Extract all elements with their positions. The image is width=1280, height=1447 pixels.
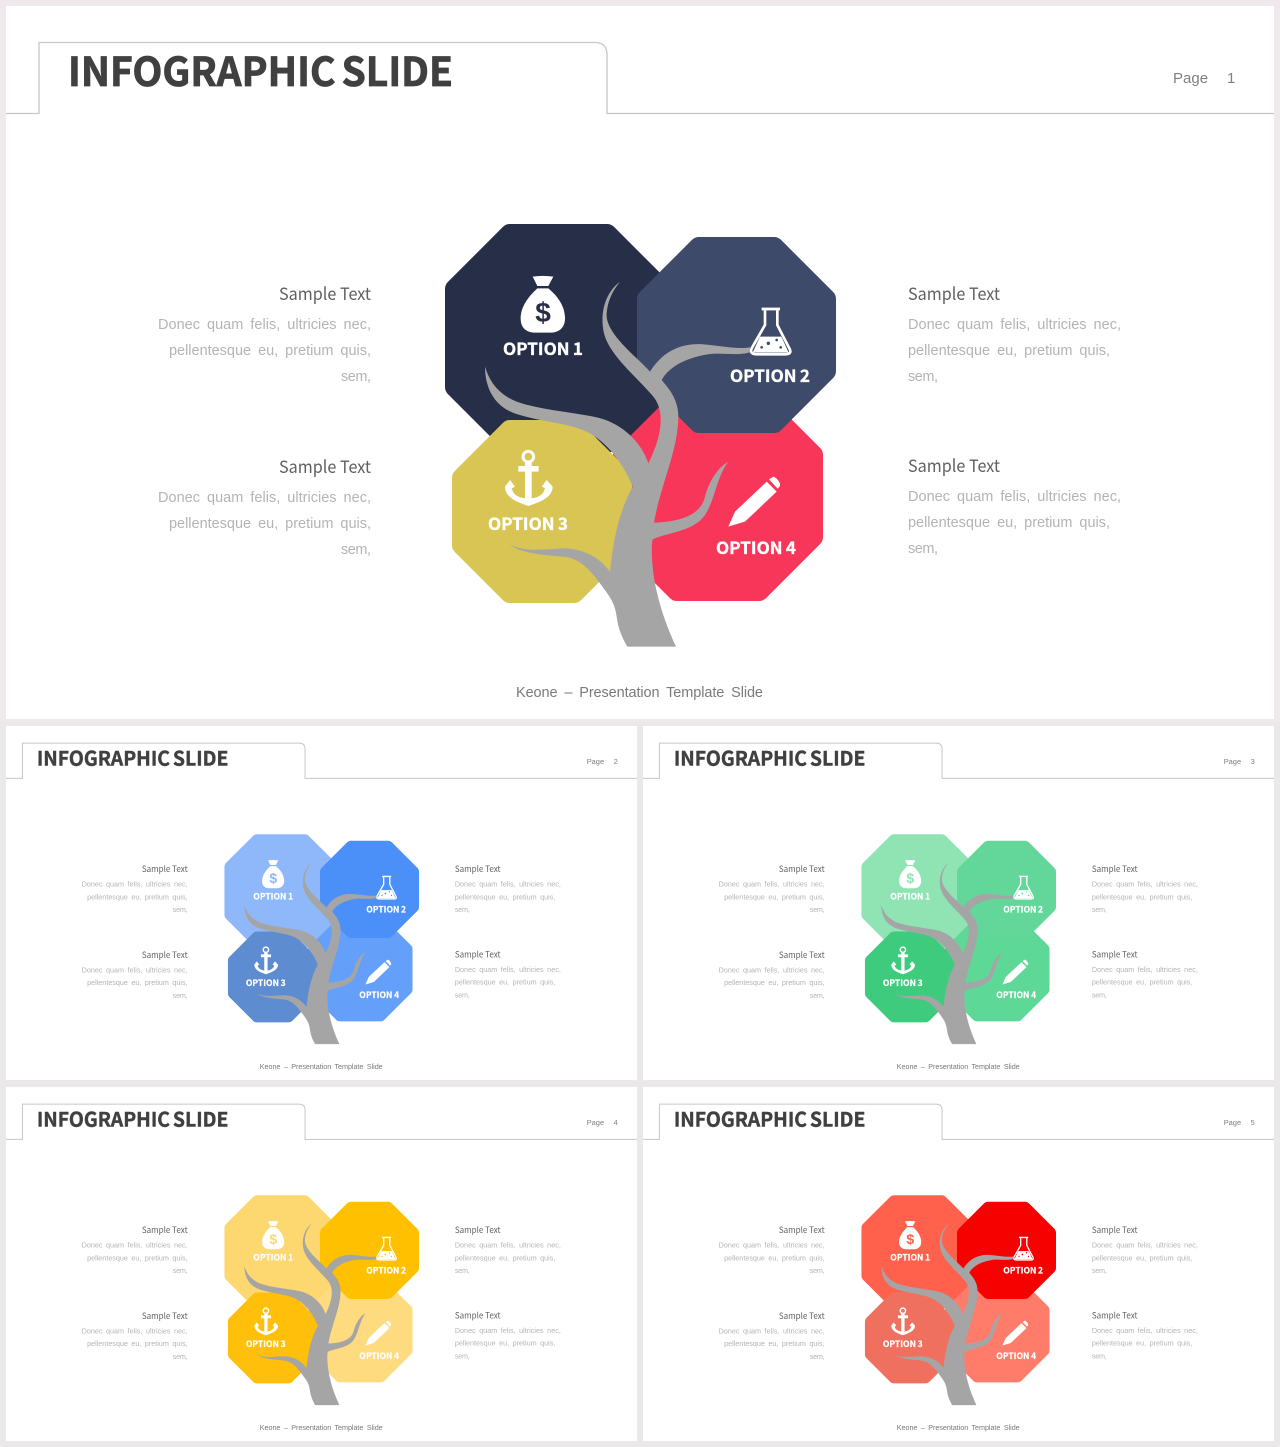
option 3 octagon	[870, 937, 950, 1017]
option 3 octagon	[233, 1298, 313, 1378]
tree diagram	[866, 839, 1051, 1044]
icon: money bag: $	[906, 870, 914, 886]
left text block 1: pellentesque eu, pretium quis,	[724, 892, 825, 901]
left text block 1: Donec quam felis, ultricies nec,	[158, 317, 371, 333]
slide 2: blue variant	[6, 726, 637, 1080]
left text block 1: Sample Text	[142, 1224, 188, 1236]
left text block 2: Donec quam felis, ultricies nec,	[719, 1326, 825, 1335]
footer: Keone – Presentation Template Slide	[897, 1423, 1020, 1432]
right text block 1: Donec quam felis, ultricies nec,	[1092, 879, 1198, 888]
page number: Page	[587, 757, 604, 766]
right text block 2: sem,	[1092, 1352, 1107, 1361]
icon: anchor	[254, 947, 278, 974]
right text block 1: sem,	[455, 905, 470, 914]
tree diagram	[229, 1200, 414, 1405]
left text block 2: sem,	[341, 542, 371, 558]
left text block 2: Donec quam felis, ultricies nec,	[158, 490, 371, 506]
option labels: OPTION 2	[730, 362, 810, 387]
option labels	[883, 1251, 1043, 1362]
left text block 1	[719, 863, 825, 914]
tree diagram	[229, 839, 414, 1044]
title tab	[643, 1104, 1274, 1139]
option labels	[488, 335, 810, 559]
right text block 2: pellentesque eu, pretium quis,	[1092, 978, 1192, 987]
slide 1: large navy, crimson and gold tree	[0, 0, 1280, 722]
right text block 2: pellentesque eu, pretium quis,	[908, 515, 1110, 531]
left text block 1: pellentesque eu, pretium quis,	[169, 343, 371, 359]
option 2 octagon	[962, 1207, 1051, 1294]
left text block 1: Sample Text	[779, 863, 825, 875]
right text block 1: Donec quam felis, ultricies nec,	[1092, 1240, 1198, 1249]
left text block 2: sem,	[173, 1352, 188, 1361]
option 3 octagon	[233, 937, 313, 1017]
left text block 1: Donec quam felis, ultricies nec,	[719, 879, 825, 888]
left text block 1: sem,	[810, 1266, 825, 1275]
right text block 1: Sample Text	[1092, 863, 1138, 875]
option labels: OPTION 3	[246, 1338, 286, 1350]
slide 5: red variant	[643, 1087, 1274, 1441]
option labels	[883, 890, 1043, 1001]
left text block 2: Sample Text	[279, 453, 372, 478]
option labels: OPTION 4	[996, 1350, 1036, 1362]
left text block 1: Donec quam felis, ultricies nec,	[82, 1240, 188, 1249]
right text block 2: Donec quam felis, ultricies nec,	[1092, 965, 1198, 974]
option 1 octagon	[229, 839, 332, 942]
footer: Keone – Presentation Template Slide	[260, 1062, 383, 1071]
tree diagram	[866, 1200, 1051, 1405]
left text block 2: Sample Text	[142, 949, 188, 961]
icon: money bag	[262, 860, 284, 888]
icon: flask	[377, 876, 396, 899]
left text block 1: Sample Text	[779, 1224, 825, 1236]
tree	[485, 282, 750, 647]
tree	[881, 1224, 1013, 1405]
left text block 2	[82, 949, 188, 1000]
slide 3: green variant	[643, 726, 1274, 1080]
left text block 2: pellentesque eu, pretium quis,	[169, 516, 371, 532]
title: INFOGRAPHIC SLIDE	[674, 1104, 865, 1133]
icon: money bag: $	[906, 1231, 914, 1247]
right text block 2: Sample Text	[1092, 948, 1138, 960]
left text block 2	[82, 1310, 188, 1361]
option 2 octagon	[962, 846, 1051, 933]
right text block 1	[908, 280, 1121, 385]
page number: 2	[614, 757, 618, 766]
right text block 1: pellentesque eu, pretium quis,	[1092, 892, 1192, 901]
slide 4: yellow variant	[6, 1087, 637, 1441]
option labels: OPTION 2	[366, 1265, 406, 1277]
option labels: OPTION 4	[359, 1350, 399, 1362]
icon: money bag: $	[269, 870, 277, 886]
page number: Page	[587, 1118, 604, 1127]
icon: flask	[377, 1237, 396, 1260]
icon: flask	[751, 309, 790, 354]
right text block 2: pellentesque eu, pretium quis,	[455, 1339, 555, 1348]
page number: 5	[1251, 1118, 1255, 1127]
right text block 1: Sample Text	[455, 863, 501, 875]
left text block 1: sem,	[173, 1266, 188, 1275]
right text block 2: pellentesque eu, pretium quis,	[455, 978, 555, 987]
right text block 2: Sample Text	[455, 1309, 501, 1321]
left text block 2	[719, 949, 825, 1000]
option 1 octagon	[455, 234, 662, 442]
tree diagram	[455, 234, 826, 647]
right text block 1: pellentesque eu, pretium quis,	[1092, 1253, 1192, 1262]
left text block 2: pellentesque eu, pretium quis,	[87, 1339, 188, 1348]
right text block 1: pellentesque eu, pretium quis,	[455, 1253, 555, 1262]
option 2 octagon	[647, 247, 826, 423]
right text block 2: Donec quam felis, ultricies nec,	[908, 489, 1121, 505]
option labels: OPTION 1	[253, 890, 293, 902]
left text block 2	[719, 1310, 825, 1361]
right text block 1: sem,	[908, 369, 938, 385]
page number: 3	[1251, 757, 1255, 766]
option labels: OPTION 3	[883, 977, 923, 989]
right text block 1: pellentesque eu, pretium quis,	[455, 892, 555, 901]
left text block 2: pellentesque eu, pretium quis,	[724, 978, 825, 987]
right text block 1: Donec quam felis, ultricies nec,	[455, 879, 561, 888]
right text block 2	[455, 948, 561, 1000]
right text block 1: sem,	[455, 1266, 470, 1275]
right text block 1: Donec quam felis, ultricies nec,	[908, 317, 1121, 333]
right text block 2	[1092, 948, 1198, 1000]
left text block 1	[82, 1224, 188, 1275]
right text block 1: sem,	[1092, 905, 1107, 914]
right text block 2: sem,	[455, 991, 470, 1000]
footer: Keone – Presentation Template Slide	[260, 1423, 383, 1432]
left text block 2: pellentesque eu, pretium quis,	[724, 1339, 825, 1348]
right text block 2: sem,	[455, 1352, 470, 1361]
left text block 2: pellentesque eu, pretium quis,	[87, 978, 188, 987]
left text block 2: Sample Text	[142, 1310, 188, 1322]
option labels: OPTION 3	[488, 510, 568, 535]
option 1 octagon	[866, 839, 969, 942]
icon: money bag	[262, 1221, 284, 1249]
left text block 2: sem,	[173, 991, 188, 1000]
right text block 1: Sample Text	[908, 280, 1001, 305]
icon: anchor	[891, 1308, 915, 1335]
option labels: OPTION 1	[890, 890, 930, 902]
option labels: OPTION 1	[253, 1251, 293, 1263]
right text block 1	[455, 863, 561, 914]
right text block 1: Sample Text	[455, 1224, 501, 1236]
left text block 2	[158, 453, 372, 558]
right text block 2: Sample Text	[908, 452, 1001, 477]
option 3 octagon	[462, 430, 622, 593]
option labels: OPTION 4	[359, 989, 399, 1001]
option 2 octagon	[325, 846, 414, 933]
tree	[881, 863, 1013, 1044]
icon: anchor	[891, 947, 915, 974]
title tab	[643, 743, 1274, 778]
right text block 1	[1092, 1224, 1198, 1275]
option 1 octagon	[229, 1200, 332, 1303]
right text block 1: sem,	[1092, 1266, 1107, 1275]
right text block 1: pellentesque eu, pretium quis,	[908, 343, 1110, 359]
page number: 1	[1227, 70, 1235, 87]
right text block 1	[455, 1224, 561, 1275]
option labels: OPTION 2	[1003, 1265, 1043, 1277]
option labels: OPTION 3	[883, 1338, 923, 1350]
left text block 1: Donec quam felis, ultricies nec,	[719, 1240, 825, 1249]
option labels: OPTION 1	[503, 335, 583, 360]
right text block 2	[1092, 1309, 1198, 1361]
tree	[244, 1224, 376, 1405]
icon: pencil	[1002, 1321, 1028, 1346]
left text block 1	[158, 280, 372, 385]
tree	[244, 863, 376, 1044]
icon: money bag	[521, 276, 565, 333]
title tab	[6, 42, 1274, 114]
icon: flask	[1014, 1237, 1033, 1260]
left text block 2: sem,	[810, 1352, 825, 1361]
title tab	[6, 1104, 637, 1139]
title: INFOGRAPHIC SLIDE	[37, 743, 228, 772]
right text block 1	[1092, 863, 1198, 914]
option 4 octagon	[313, 1283, 408, 1377]
right text block 1: Donec quam felis, ultricies nec,	[455, 1240, 561, 1249]
icon: money bag: $	[535, 297, 551, 328]
left text block 2: Sample Text	[779, 949, 825, 961]
left text block 1: Sample Text	[142, 863, 188, 875]
option labels: OPTION 1	[890, 1251, 930, 1263]
left text block 2: Donec quam felis, ultricies nec,	[82, 1326, 188, 1335]
right text block 2: Donec quam felis, ultricies nec,	[1092, 1326, 1198, 1335]
option labels: OPTION 4	[716, 534, 796, 559]
right text block 2: Sample Text	[1092, 1309, 1138, 1321]
title: INFOGRAPHIC SLIDE	[37, 1104, 228, 1133]
title: INFOGRAPHIC SLIDE	[68, 40, 453, 98]
page number: 4	[614, 1118, 618, 1127]
icon: pencil	[365, 1321, 391, 1346]
left text block 1: Donec quam felis, ultricies nec,	[82, 879, 188, 888]
left text block 1: pellentesque eu, pretium quis,	[87, 1253, 188, 1262]
option 4 octagon	[950, 922, 1045, 1016]
icon: pencil	[365, 960, 391, 985]
left text block 1: pellentesque eu, pretium quis,	[724, 1253, 825, 1262]
right text block 2: sem,	[908, 541, 938, 557]
title tab	[6, 743, 637, 778]
option labels: OPTION 4	[996, 989, 1036, 1001]
left text block 1: pellentesque eu, pretium quis,	[87, 892, 188, 901]
right text block 2: Donec quam felis, ultricies nec,	[455, 1326, 561, 1335]
icon: anchor	[254, 1308, 278, 1335]
option labels: OPTION 3	[246, 977, 286, 989]
right text block 2	[908, 452, 1121, 557]
option labels	[246, 1251, 406, 1362]
right text block 2: Donec quam felis, ultricies nec,	[455, 965, 561, 974]
left text block 2: sem,	[810, 991, 825, 1000]
left text block 1	[719, 1224, 825, 1275]
right text block 2	[455, 1309, 561, 1361]
right text block 2: sem,	[1092, 991, 1107, 1000]
right text block 1: Sample Text	[1092, 1224, 1138, 1236]
footer: Keone – Presentation Template Slide	[516, 685, 763, 701]
option 4 octagon	[623, 401, 813, 591]
icon: anchor	[505, 451, 553, 506]
right text block 2: Sample Text	[455, 948, 501, 960]
left text block 2: Sample Text	[779, 1310, 825, 1322]
icon: money bag	[899, 860, 921, 888]
left text block 2: Donec quam felis, ultricies nec,	[719, 965, 825, 974]
left text block 1: sem,	[810, 905, 825, 914]
option 2 octagon	[325, 1207, 414, 1294]
right text block 2: pellentesque eu, pretium quis,	[1092, 1339, 1192, 1348]
page number: Page	[1224, 1118, 1241, 1127]
left text block 1: sem,	[341, 369, 371, 385]
left text block 1: sem,	[173, 905, 188, 914]
icon: flask	[1014, 876, 1033, 899]
title: INFOGRAPHIC SLIDE	[674, 743, 865, 772]
option 4 octagon	[313, 922, 408, 1016]
option 4 octagon	[950, 1283, 1045, 1377]
option labels: OPTION 2	[366, 904, 406, 916]
left text block 1	[82, 863, 188, 914]
option 3 octagon	[870, 1298, 950, 1378]
footer: Keone – Presentation Template Slide	[897, 1062, 1020, 1071]
icon: money bag: $	[269, 1231, 277, 1247]
option labels: OPTION 2	[1003, 904, 1043, 916]
left text block 2: Donec quam felis, ultricies nec,	[82, 965, 188, 974]
option labels	[246, 890, 406, 1001]
page number: Page	[1224, 757, 1241, 766]
option 1 octagon	[866, 1200, 969, 1303]
icon: pencil	[1002, 960, 1028, 985]
page number: Page	[1173, 70, 1208, 87]
left text block 1: Sample Text	[279, 280, 372, 305]
icon: money bag	[899, 1221, 921, 1249]
icon: pencil	[728, 477, 780, 527]
